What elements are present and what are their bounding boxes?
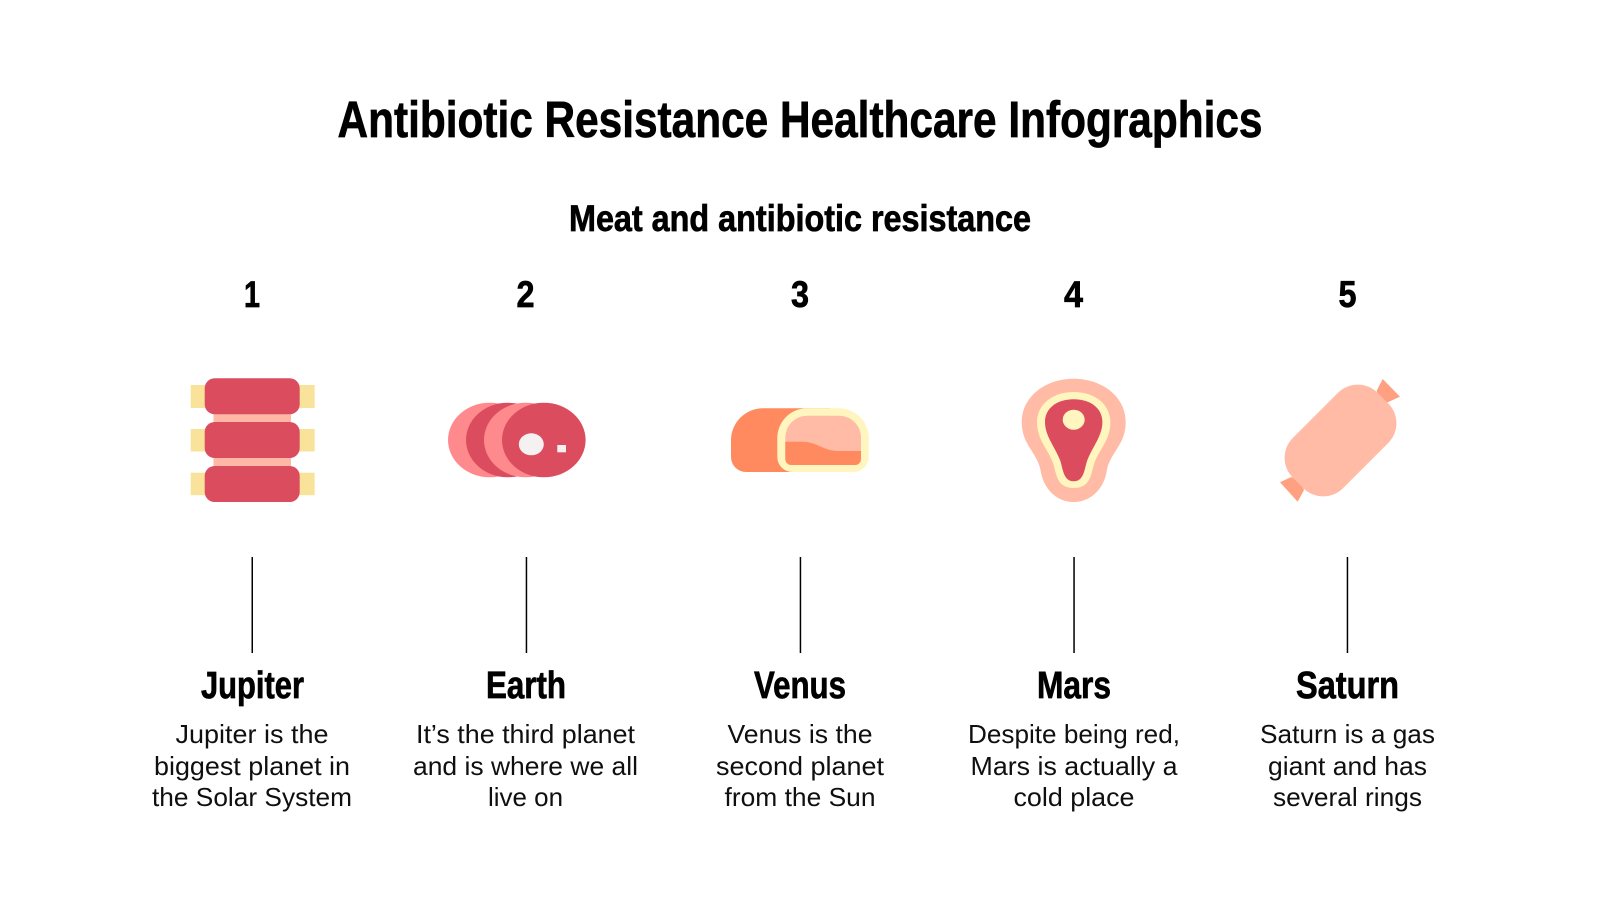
connector line 3	[800, 557, 801, 653]
text block Earth	[413, 719, 638, 812]
text block Venus: second planet	[716, 751, 885, 781]
text block Mars: Mars is actually a	[970, 751, 1178, 781]
icon: sausage	[1273, 373, 1408, 508]
text block Earth: It’s the third planet	[416, 719, 636, 749]
icon: sliced meat	[448, 403, 586, 477]
text block Mars: Despite being red,	[968, 719, 1180, 749]
text block Earth: and is where we all	[413, 751, 638, 781]
heading Jupiter: Jupiter	[201, 665, 304, 707]
panel: column 3 Venus	[716, 274, 885, 812]
title: Antibiotic Resistance Healthcare Infographics	[338, 91, 1262, 148]
heading Saturn: Saturn	[1296, 665, 1399, 707]
panel: column 1 Jupiter	[152, 274, 352, 812]
text block Jupiter	[152, 719, 352, 812]
text block Jupiter: Jupiter is the	[176, 719, 328, 749]
subtitle: Meat and antibiotic resistance	[569, 198, 1031, 239]
icon: ribs	[191, 378, 315, 502]
connector line 2	[526, 557, 527, 653]
connector line 4	[1073, 557, 1075, 653]
text block Saturn: several rings	[1273, 782, 1422, 812]
text block Saturn: Saturn is a gas	[1260, 719, 1435, 749]
number 4: 4	[1064, 274, 1083, 315]
connector line 5	[1347, 557, 1348, 653]
panel: column 4 Mars	[968, 274, 1180, 812]
text block Mars	[968, 719, 1180, 812]
text block Earth: live on	[488, 782, 563, 812]
text block Jupiter: the Solar System	[152, 782, 352, 812]
icon: steak	[1022, 379, 1126, 502]
icon: ham	[731, 408, 869, 472]
number 2: 2	[516, 274, 534, 315]
heading Mars: Mars	[1037, 665, 1111, 707]
number 5: 5	[1338, 274, 1356, 315]
panel: column 2 Earth	[413, 274, 638, 812]
text block Venus: from the Sun	[724, 782, 876, 812]
connector line 1	[252, 557, 253, 653]
text block Venus	[716, 719, 885, 812]
heading Earth: Earth	[486, 665, 566, 707]
text block Mars: cold place	[1014, 782, 1134, 812]
text block Saturn: giant and has	[1268, 751, 1427, 781]
heading Venus: Venus	[754, 665, 846, 707]
number 1: 1	[244, 274, 260, 315]
text block Saturn	[1260, 719, 1435, 812]
number 3: 3	[791, 274, 809, 315]
text block Jupiter: biggest planet in	[154, 751, 350, 781]
panel: column 5 Saturn	[1260, 274, 1435, 812]
text block Venus: Venus is the	[728, 719, 872, 749]
